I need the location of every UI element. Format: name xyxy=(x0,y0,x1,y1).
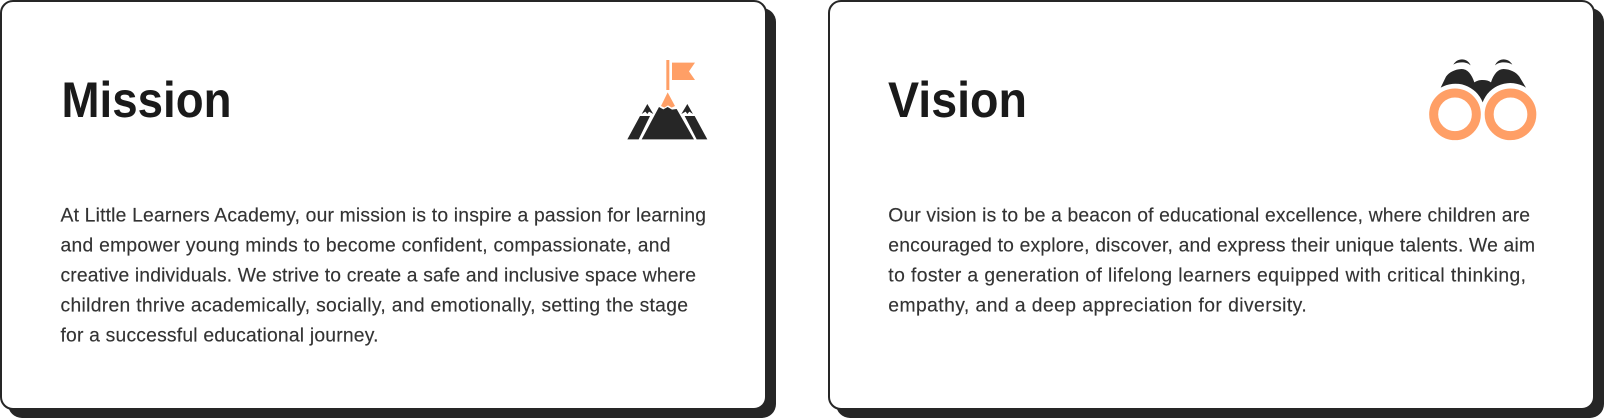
body text: mission: for a successful educational journey. xyxy=(60,326,378,347)
heading: vision: Vision xyxy=(888,72,1027,128)
body text: mission: At Little Learners Academy, our mission is to inspire a passion for learning xyxy=(60,206,706,227)
body text: vision xyxy=(888,206,1535,317)
panel: vision xyxy=(829,1,1604,418)
card: mission xyxy=(1,1,766,409)
body text: mission: and empower young minds to become confident, compassionate, and xyxy=(60,236,670,257)
heading: mission: Mission xyxy=(62,72,232,128)
body text: vision: Our vision is to be a beacon of educational excellence, where children are xyxy=(888,206,1530,227)
card shadow: mission xyxy=(8,8,776,418)
icon: mountain with flag xyxy=(627,60,707,139)
card: vision xyxy=(829,1,1594,409)
card shadow: vision xyxy=(836,8,1604,418)
body text: vision: encouraged to explore, discover, and express their unique talents. We aim xyxy=(888,236,1535,257)
panel: mission xyxy=(1,1,776,418)
body text: mission xyxy=(60,206,706,347)
body text: vision: to foster a generation of lifelong learners equipped with critical thinking, xyxy=(888,266,1526,287)
body text: vision: empathy, and a deep appreciation for diversity. xyxy=(888,296,1307,317)
body text: mission: creative individuals. We strive to create a safe and inclusive space where xyxy=(60,266,696,287)
icon: binoculars xyxy=(1434,59,1532,136)
body text: mission: children thrive academically, socially, and emotionally, setting the stage xyxy=(60,296,688,317)
